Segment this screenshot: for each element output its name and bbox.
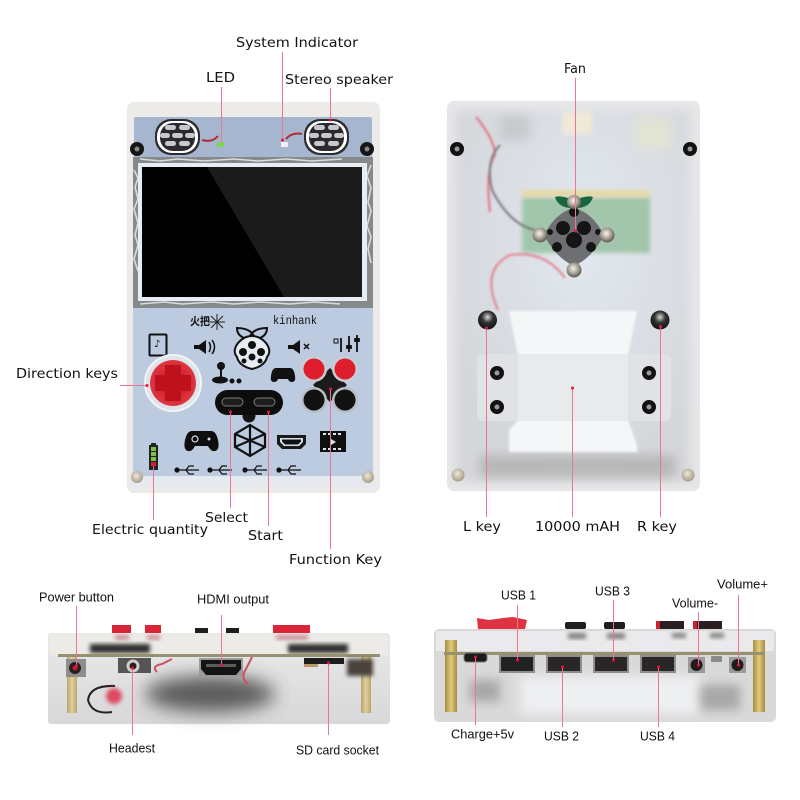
label: USB 1: USB 1 xyxy=(501,588,536,602)
label: Direction keys: Direction keys xyxy=(16,366,118,382)
icon: battery level xyxy=(149,443,158,470)
icon: large gamepad xyxy=(184,431,219,451)
icon: HDMI xyxy=(277,435,306,449)
headset jack xyxy=(118,658,151,673)
logo: brand mark: 火把 xyxy=(190,313,210,329)
label: Volume+: Volume+ xyxy=(717,577,768,591)
icons: USB symbols xyxy=(175,466,301,474)
label: 10000 mAH: 10000 mAH xyxy=(535,519,620,535)
volume buttons xyxy=(688,656,746,673)
label: System Indicator: System Indicator xyxy=(236,35,358,51)
blue top board xyxy=(134,117,372,159)
function keys xyxy=(301,356,358,413)
icon: mute xyxy=(288,340,309,354)
dark corners xyxy=(470,680,740,710)
black screws xyxy=(450,142,697,414)
label: Electric quantity: Electric quantity xyxy=(92,522,208,538)
top frosted band xyxy=(436,631,774,651)
logo: sparkle xyxy=(209,314,225,330)
brass posts xyxy=(67,655,371,713)
micro USB port xyxy=(464,653,487,662)
right post block xyxy=(347,659,373,676)
leader lines xyxy=(76,52,738,735)
label: LED: LED xyxy=(206,70,235,86)
HDMI port xyxy=(199,658,243,677)
label: L key: L key xyxy=(463,519,501,535)
panel: front view of console xyxy=(127,102,380,493)
select and start pill xyxy=(215,390,283,422)
icon: green LED xyxy=(217,142,224,147)
bottom corner screws xyxy=(131,471,374,483)
icon: volume up xyxy=(194,340,214,354)
USB ports xyxy=(499,655,676,673)
SD card slot xyxy=(304,658,344,667)
icon: left speaker xyxy=(155,119,200,155)
bottom light strip xyxy=(133,476,373,487)
marbled screen frame xyxy=(133,157,373,310)
label: Charge+5v: Charge+5v xyxy=(451,727,515,741)
direction keys d-pad xyxy=(145,355,201,411)
battery pack xyxy=(509,311,637,452)
label: R key: R key xyxy=(637,519,677,535)
icon: small gamepad xyxy=(271,368,295,382)
leader dots xyxy=(75,118,740,670)
L key knob xyxy=(478,310,497,330)
green circuit board xyxy=(522,197,650,253)
circuit board edge xyxy=(444,652,764,655)
speaker shadows xyxy=(90,644,348,653)
yellow board edge xyxy=(522,190,650,197)
label: USB 2: USB 2 xyxy=(544,729,579,743)
label: Select: Select xyxy=(205,510,248,526)
translucent case xyxy=(48,633,390,724)
brass posts xyxy=(445,640,765,712)
panel: right side view xyxy=(434,617,776,722)
screen xyxy=(138,163,367,301)
battery bracket xyxy=(477,354,671,421)
top black screws xyxy=(130,142,374,156)
icon: raspberry logo xyxy=(235,328,269,369)
label: Volume-: Volume- xyxy=(672,596,718,610)
button shadows xyxy=(115,635,308,640)
brass corner screws xyxy=(452,468,694,482)
label: Headest: Headest xyxy=(109,741,156,755)
label: Fan: Fan xyxy=(564,61,586,77)
label: Function Key: Function Key xyxy=(289,552,382,568)
power button xyxy=(66,659,86,677)
label: Stereo speaker: Stereo speaker xyxy=(285,72,393,88)
icon: system indicator LED xyxy=(281,142,288,147)
wire loops xyxy=(88,657,252,712)
bright interior reflection xyxy=(520,676,700,714)
frosted dark interior xyxy=(145,676,275,712)
red and grey wires xyxy=(476,117,565,310)
side top buttons xyxy=(112,625,310,634)
translucent case xyxy=(434,629,776,722)
button shadows xyxy=(568,633,724,639)
icon: right speaker xyxy=(304,119,349,155)
lower blue board xyxy=(133,308,373,476)
label: Start: Start xyxy=(248,528,283,544)
fan xyxy=(532,195,614,278)
acrylic case front xyxy=(127,102,380,493)
speaker wires xyxy=(202,134,302,141)
brand name: kinhank xyxy=(273,314,317,328)
blurred interior xyxy=(456,110,690,482)
top frosted band xyxy=(50,635,388,655)
icon: music card: ♪ xyxy=(154,339,160,350)
side top buttons xyxy=(477,617,722,630)
icon: music card xyxy=(150,334,166,356)
battery face xyxy=(518,354,628,421)
frosted back case xyxy=(447,101,700,491)
circuit board edge xyxy=(58,654,380,657)
label: HDMI output: HDMI output xyxy=(197,592,270,606)
label: USB 4: USB 4 xyxy=(640,729,675,743)
label: USB 3: USB 3 xyxy=(595,584,630,598)
R key knob xyxy=(650,310,670,330)
icon: geometric snowflake xyxy=(235,425,265,456)
label: Power button: Power button xyxy=(39,590,114,604)
icon: joystick xyxy=(212,362,242,384)
icon: sliders xyxy=(334,335,359,352)
label: SD card socket: SD card socket xyxy=(296,743,380,757)
icon: film strip xyxy=(320,431,346,452)
panel: left side view xyxy=(48,625,390,724)
panel: back view of console xyxy=(447,101,700,491)
